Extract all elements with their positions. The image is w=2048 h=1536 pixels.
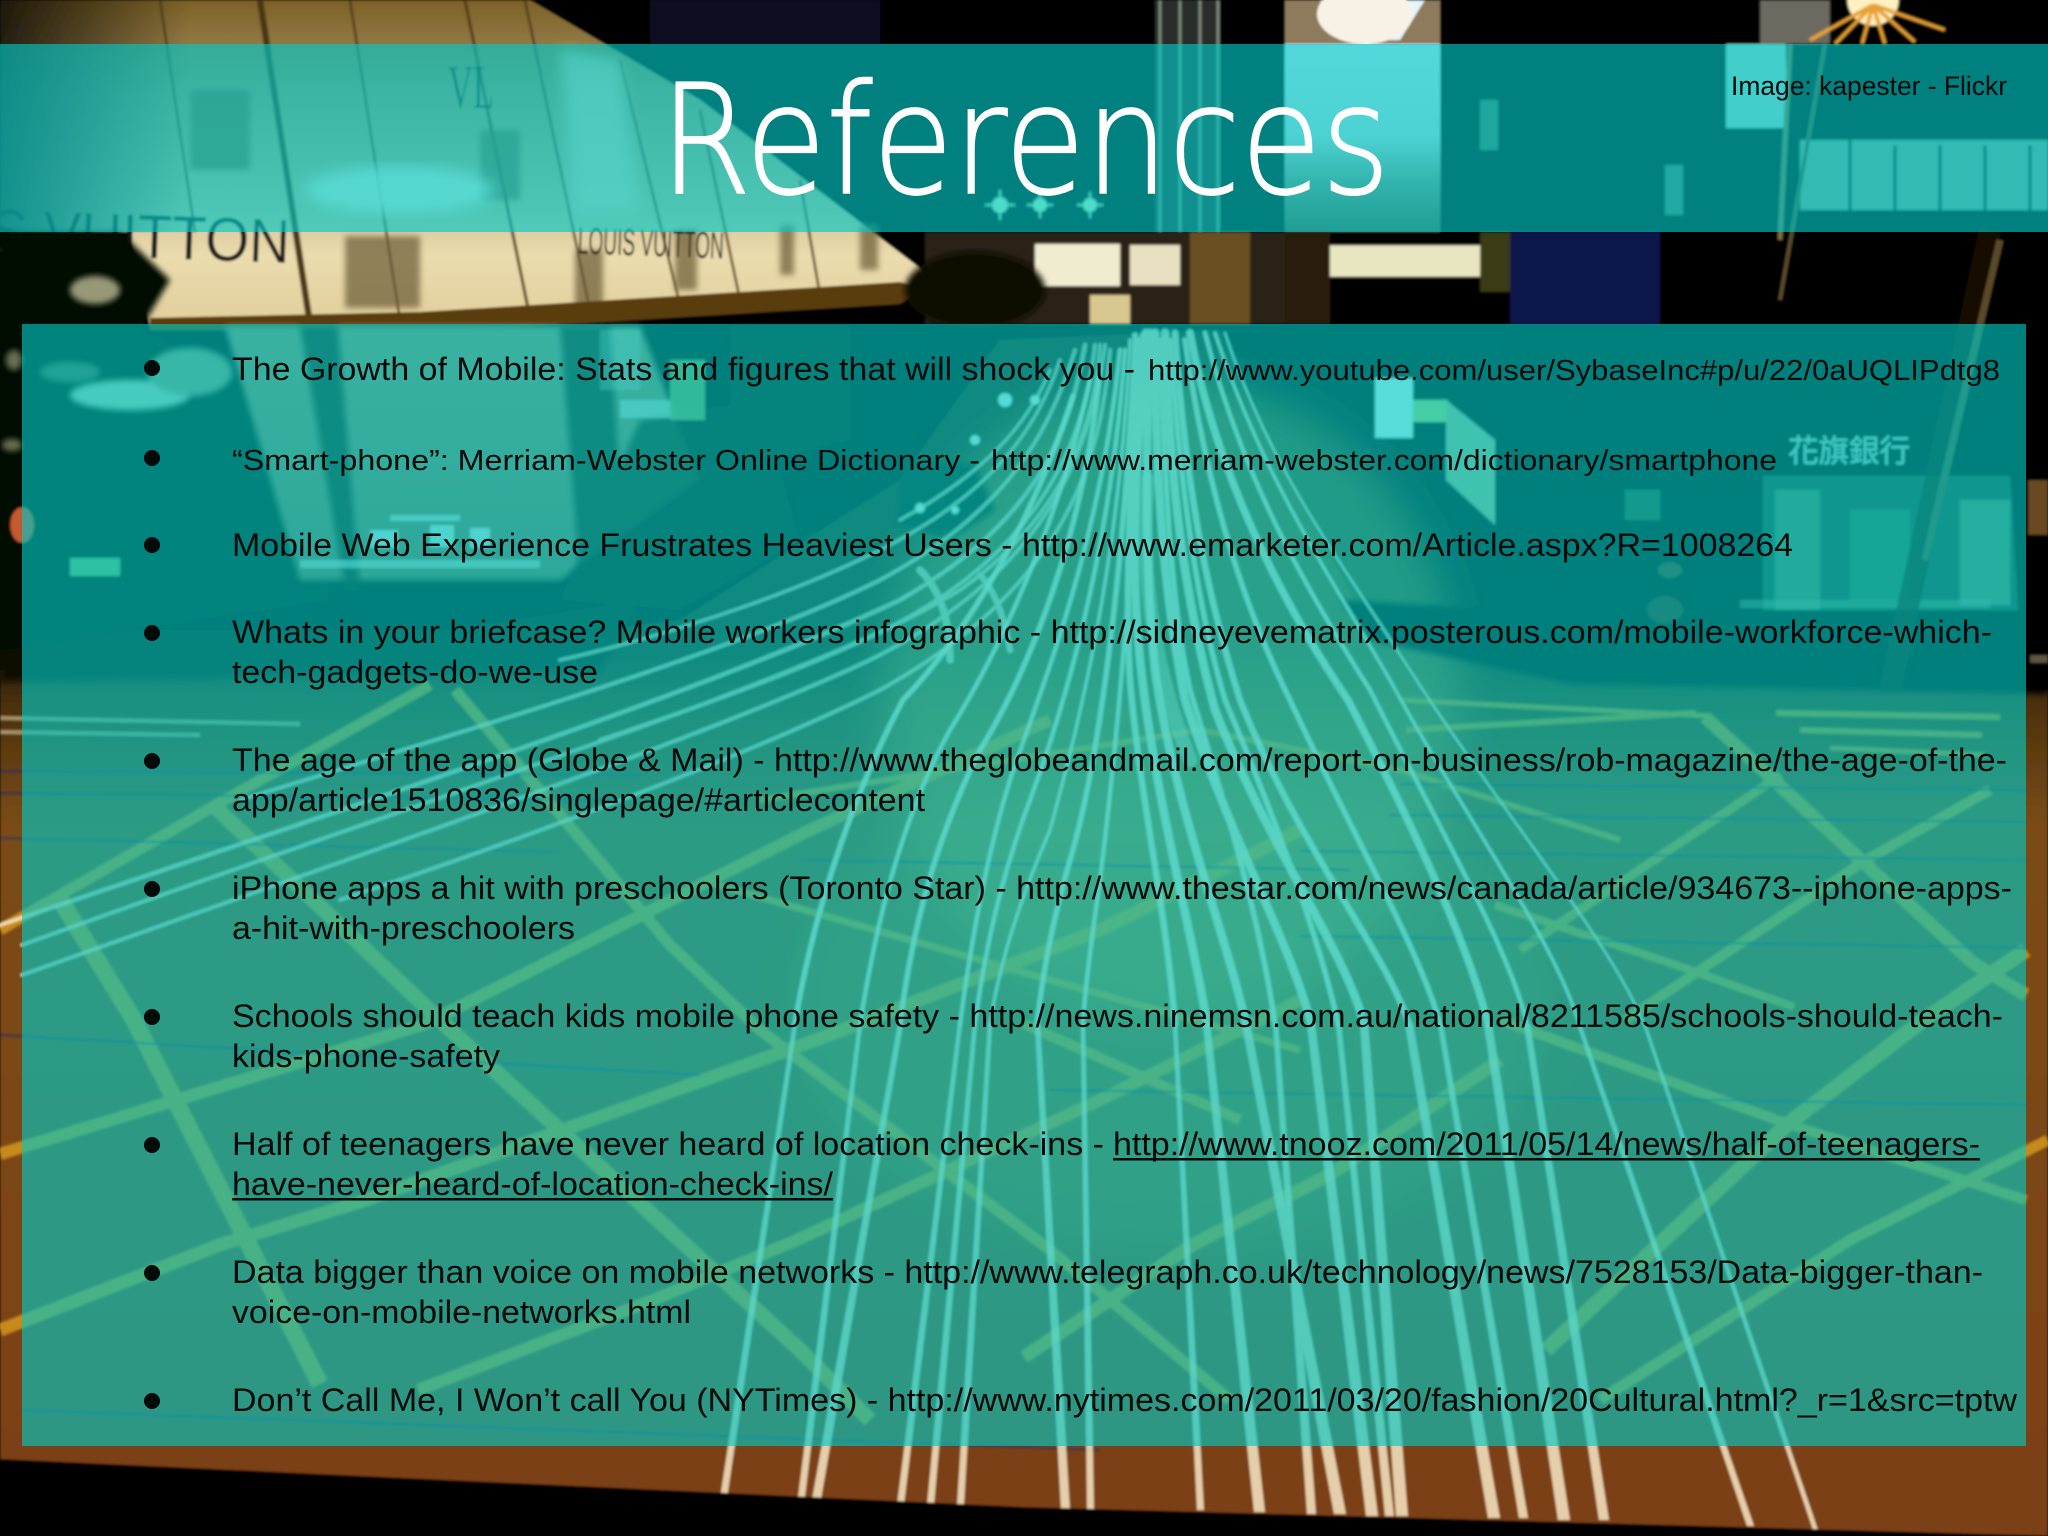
central buildings top — [1155, 0, 1220, 232]
reference 1 — [144, 351, 2000, 387]
reference 8: http://www.tnooz.com/2011/05/14/news/half-of-teenagers- — [1113, 1126, 1980, 1162]
reference 9: Data bigger than voice on mobile networks - http://www.telegraph.co.uk/technology/news/7528153/Data-bigger-than- — [232, 1254, 1983, 1290]
lower facade behind panel — [225, 326, 700, 580]
cars on the road — [895, 460, 995, 540]
light trails fanning out across the road — [0, 333, 1644, 1024]
trails curving left — [0, 345, 1110, 975]
reference 2: http://www.merriam-webster.com/dictionary/smartphone — [991, 445, 1777, 477]
store logo lettering in the photo: LOUIS VUITTON — [577, 220, 725, 268]
reference 3: Mobile Web Experience Frustrates Heaviest Users - http://www.emarketer.com/Article.aspx?R=1008264 — [232, 527, 1793, 563]
title band overlay — [0, 44, 2048, 232]
reference 7 — [144, 998, 2003, 1074]
road glow near centre — [880, 380, 1460, 1020]
bank sign in the photo: 花旗銀行 — [1788, 434, 1910, 469]
reference 2 — [144, 445, 1777, 477]
dark shopfronts behind the panel right — [1375, 378, 2018, 624]
dark curb band — [0, 600, 640, 682]
glass buildings right — [1480, 44, 2048, 240]
reference 4: tech-gadgets-do-we-use — [232, 654, 598, 690]
billboard with face — [1285, 0, 1440, 232]
reference list — [144, 351, 2018, 1418]
reference 7: Schools should teach kids mobile phone safety - http://news.ninemsn.com.au/national/8211585/schools-should-teach- — [232, 998, 2003, 1034]
reference 5 — [144, 742, 2007, 818]
street poles — [1780, 44, 2000, 690]
reference 2: “Smart-phone”: Merriam-Webster Online Dictionary - — [232, 445, 980, 477]
facade highlight bright display — [305, 166, 495, 214]
red sign at far left — [10, 507, 34, 543]
reference 6: a-hit-with-preschoolers — [232, 910, 575, 946]
right-edge building highlights — [2028, 480, 2048, 663]
reference 7: kids-phone-safety — [232, 1038, 500, 1074]
street lights behind title — [985, 190, 1103, 220]
reference 9: voice-on-mobile-networks.html — [232, 1294, 691, 1330]
reference 1: The Growth of Mobile: Stats and figures that will shock you - — [232, 351, 1135, 387]
image credit: Image: kapester - Flickr — [1731, 71, 2007, 101]
reference 4: Whats in your briefcase? Mobile workers infographic - http://sidneyevematrix.posterous.com/mobile-workforce-which- — [232, 614, 1992, 650]
reference 4 — [144, 614, 1992, 690]
reference 9 — [144, 1254, 1983, 1330]
reference 8 — [144, 1126, 1980, 1202]
reference 6: iPhone apps a hit with preschoolers (Toronto Star) - http://www.thestar.com/news/canada/article/934673--iphone-apps- — [232, 870, 2012, 906]
lower tapered trails — [719, 1024, 1818, 1530]
reference 5: app/article1510836/singlepage/#articlecontent — [232, 782, 925, 818]
road surface — [0, 330, 2048, 1536]
reference 5: The age of the app (Globe & Mail) - http://www.theglobeandmail.com/report-on-business/rob-magazine/the-age-of-the- — [232, 742, 2007, 778]
white road stripes left — [0, 718, 300, 735]
facade upper: Louis Vuitton store — [0, 0, 925, 326]
yellow box-junction road markings — [0, 685, 2048, 1420]
store logo lettering in the photo: VL — [448, 54, 494, 122]
title: References — [660, 52, 1390, 229]
store logo lettering in the photo — [0, 54, 725, 277]
bright central trail bundle — [1145, 480, 1190, 760]
facade seams and dark patches — [160, 0, 820, 324]
trees left — [0, 232, 330, 650]
trails heading down — [795, 333, 1644, 1024]
reference 1: http://www.youtube.com/user/SybaseInc#p/u/22/0aUQLIPdtg8 — [1148, 355, 2000, 387]
facade left shading — [0, 0, 190, 232]
reference 6 — [144, 870, 2012, 946]
trees centre — [905, 252, 1045, 328]
content panel overlay — [22, 324, 2026, 1446]
bottom black wedge — [0, 1459, 2048, 1536]
reference 8: have-never-heard-of-location-check-ins/ — [232, 1166, 833, 1202]
lit stores below the title — [925, 232, 1660, 324]
street lamp glare top right — [1760, 0, 1945, 44]
dark blue road lines — [0, 771, 2026, 1450]
reference 8: Half of teenagers have never heard of location check-ins - — [232, 1126, 1104, 1162]
reference 10: Don’t Call Me, I Won’t call You (NYTimes) - http://www.nytimes.com/2011/03/20/fashion/20Cultural.html?_r=1&src=tptw — [232, 1382, 2018, 1418]
lit shop under facade — [70, 330, 705, 576]
golden awning strip — [150, 282, 925, 330]
